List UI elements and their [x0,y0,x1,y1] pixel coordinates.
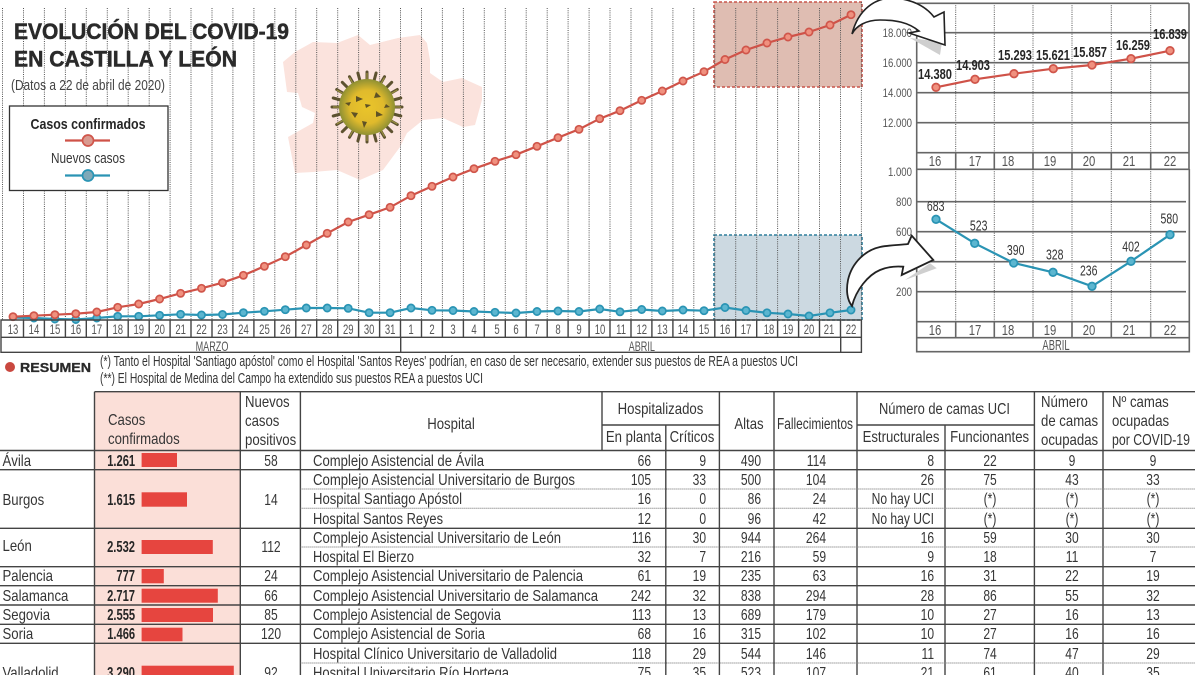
zoom chart: confirmed cases 16-22 April: 16 [929,153,941,169]
hospital row: Ávila: Complejo Asistencial de Ávila [313,453,484,470]
hospital row: León universitario: 30 [693,529,706,546]
date axis: 8 [555,321,561,338]
date axis: 2 [429,321,435,338]
province: Soria: Soria [3,626,33,643]
table header: Hospital [427,416,475,433]
zoom chart: confirmed cases 16-22 April: 16.259 [1116,36,1150,53]
hospital row: Santos Reyes [313,510,1159,528]
zoom chart: confirmed cases 16-22 April: 21 [1123,153,1135,169]
table header: Casos [108,412,145,429]
date axis: MARZO [196,338,228,355]
province: Palencia: 24 [264,567,278,584]
legend: Nuevos casos [51,150,125,167]
zoom chart: confirmed cases 16-22 April: 14.000 [883,87,912,100]
hospital row: Palencia: 19 [693,567,706,584]
legend [10,106,168,190]
hospital row: El Bierzo: 11 [1066,548,1079,565]
hospital row: Salamanca: 242 [631,587,651,604]
hospital row: Salamanca: 28 [921,587,934,604]
hospital row: Burgos universitario: Complejo Asistencial Universitario de Burgos [313,472,575,489]
province: Salamanca: Salamanca [3,588,68,605]
hospital row: Salamanca [313,587,1160,605]
province: León: 112 [261,538,281,555]
hospital row: Santiago Apóstol: (*) [1147,490,1159,507]
province: Soria: 1.466 [107,625,136,642]
hospital row: El Bierzo: 32 [638,548,651,565]
hospital row: Burgos universitario: 105 [631,471,651,488]
hospital row: Clínico Valladolid: 29 [693,645,706,662]
hospital row: Burgos universitario: 33 [1146,471,1160,488]
hospital row: Santiago Apóstol: 24 [813,490,826,507]
date axis: 16 [71,321,81,338]
province: Burgos: Burgos [3,492,44,509]
footnotes: (*) Tanto el Hospital 'Santiago apóstol' como el Hospital 'Santos Reyes' podrían, en caso de ser necesario, extender sus puestos de REA a puestos UCI [100,354,798,370]
zoom chart: confirmed cases 16-22 April: 20 [1083,153,1095,169]
zoom chart: confirmed cases 16-22 April: 14.380 [918,65,952,82]
date axis: 4 [471,321,477,338]
hospital row: Soria: 315 [741,625,761,642]
province: León: León [3,538,32,555]
date axis: 14 [29,321,40,338]
hospital row: Ávila: 66 [638,452,651,469]
hospital row: León universitario: 116 [632,529,651,546]
hospital row: Santos Reyes: 12 [638,510,651,527]
hospital row: Segovia [313,606,1160,624]
zoom chart: new cases 16-22 April: 17 [969,322,981,338]
hospital row: Clínico Valladolid: Hospital Clínico Universitario de Valladolid [313,646,557,663]
hospital row: Segovia: 13 [693,606,706,623]
table header: de camas [1041,413,1098,430]
date axis: 31 [385,321,396,338]
date axis: 20 [804,321,815,338]
date axis: 28 [322,321,333,338]
title [14,19,289,72]
hospital row: Segovia: 689 [741,606,761,623]
hospital row: Burgos universitario: 43 [1065,471,1079,488]
hospital row: Ávila: 8 [927,452,934,469]
hospital row: Salamanca: 32 [693,587,706,604]
table header: positivos [245,432,296,449]
date axis: 9 [576,321,582,338]
hospital row: Santiago Apóstol: (*) [1066,490,1078,507]
zoom chart: new cases 16-22 April [888,166,1189,354]
hospital row: Segovia: Complejo Asistencial de Segovia [313,607,501,624]
line chart: confirmed cases [9,11,855,320]
hospital row: León universitario: Complejo Asistencial Universitario de León [313,530,561,547]
hospital row: Palencia: Complejo Asistencial Universitario de Palencia [313,568,583,585]
date axis: 18 [764,321,775,338]
zoom chart: new cases 16-22 April: 328 [1046,246,1063,263]
province: Salamanca: 2.717 [107,587,135,604]
table header: Hospitalizados [618,401,703,418]
date axis: 19 [133,321,144,338]
hospital row: Salamanca: 32 [1146,587,1160,604]
date axis: 23 [217,321,228,338]
table header: Número [1041,394,1088,411]
date axis: 13 [657,321,668,338]
legend: Casos confirmados [30,116,146,133]
table header: Funcionantes [950,429,1029,446]
line chart: new cases [13,304,855,323]
hospital row: Soria: 16 [1146,625,1160,642]
hospital row: Santos Reyes: (*) [1147,510,1159,527]
hospital row: Segovia: 13 [1146,606,1160,623]
hospital row: Ávila: 490 [741,452,761,469]
hospital row: León universitario: 30 [1146,529,1160,546]
zoom chart: new cases 16-22 April: 402 [1122,238,1140,255]
province: Burgos [2,491,278,509]
province: Ávila: Ávila [3,452,31,470]
hospital row: El Bierzo: 9 [927,548,934,565]
hospital row: León universitario: 16 [921,529,934,546]
zoom chart: new cases 16-22 April: 20 [1083,322,1095,338]
date axis: 22 [196,321,207,338]
zoom chart: confirmed cases 16-22 April: 16.000 [883,57,912,70]
map of Castilla y León [283,35,482,180]
table header: Fallecimientos [777,416,853,433]
zoom chart: new cases 16-22 April: 600 [896,226,912,239]
date axis: 6 [513,321,519,338]
zoom chart: confirmed cases 16-22 April: 18 [1002,153,1014,169]
zoom chart: confirmed cases 16-22 April: 17 [969,153,981,169]
province: Ávila [2,452,278,470]
table header: Nuevos [245,394,290,411]
date axis: 19 [783,321,794,338]
zoom chart: new cases 16-22 April: 390 [1007,241,1024,258]
table header: ocupadas [1112,413,1169,430]
date axis: 7 [534,321,540,338]
title: EVOLUCIÓN DEL COVID-19 [14,19,289,44]
hospital row: Segovia: 179 [806,606,826,623]
hospital row: Santiago Apóstol: Hospital Santiago Apóstol [313,491,462,508]
hospital row: Santos Reyes: (*) [984,510,996,527]
table header: Número de camas UCI [879,401,1010,418]
hospital row: Salamanca: 86 [983,587,997,604]
hospital row: Santos Reyes: No hay UCI [872,510,934,527]
table header: casos [245,413,279,430]
hospital row: Clínico Valladolid: 544 [741,645,761,662]
zoom chart: confirmed cases 16-22 April: 15.621 [1036,46,1070,63]
hospital row: Ávila: 9 [699,452,706,469]
table rules [0,392,1195,675]
table header: Críticos [670,429,714,446]
hospital row: Clínico Valladolid: 146 [806,645,826,662]
hospital row: Soria: Complejo Asistencial de Soria [313,626,485,643]
hospital row: Santos Reyes: Hospital Santos Reyes [313,511,443,528]
hospital row: Segovia: 16 [1065,606,1079,623]
province: Segovia: Segovia [3,607,50,624]
hospital row: Santiago Apóstol: No hay UCI [872,490,934,507]
hospital row: Palencia: 16 [921,567,934,584]
zoom chart: new cases 16-22 April: 22 [1164,322,1176,338]
footnotes: (**) El Hospital de Medina del Campo ha extendido sus puestos REA a puestos UCI [100,371,483,387]
hospital row: Clínico Valladolid [313,645,1160,663]
arrow: to confirmed cases zoom [852,0,945,55]
hospital row: El Bierzo: 59 [813,548,826,565]
hospital row: Santiago Apóstol: 0 [699,490,706,507]
province: León: 2.532 [107,538,135,555]
hospital row: Palencia: 31 [983,567,997,584]
hospital row: Segovia: 113 [632,606,651,623]
hospital row: Santiago Apóstol: 86 [748,490,761,507]
date axis: 18 [112,321,123,338]
hospital row: El Bierzo: 18 [983,548,997,565]
highlight box: confirmed cases [714,2,862,87]
zoom chart: confirmed cases 16-22 April: 16.839 [1153,25,1187,42]
hospital row: León universitario [313,529,1160,547]
hospital row: Burgos universitario: 26 [921,471,934,488]
table header: Altas [734,416,764,433]
province: Palencia: Palencia [3,568,53,585]
province: Burgos: 14 [264,491,278,508]
province: Segovia: 85 [264,606,278,623]
hospital row: Ávila [313,452,1157,470]
hospital row: Salamanca: 55 [1065,587,1079,604]
hospital row: Clínico Valladolid: 74 [983,645,997,662]
hospital row: El Bierzo: 7 [699,548,706,565]
hospital row: Soria [313,625,1160,643]
province: Ávila: 1.261 [107,452,136,469]
zoom chart: new cases 16-22 April: 21 [1123,322,1135,338]
date axis: 12 [636,321,647,338]
province: Salamanca: 66 [264,587,278,604]
zoom chart: new cases 16-22 April: 800 [896,196,912,209]
province: Salamanca [2,587,278,605]
title: EN CASTILLA Y LEÓN [14,46,237,72]
hospital row: Salamanca: Complejo Asistencial Universitario de Salamanca [313,588,598,605]
hospital row: Palencia: 63 [813,567,826,584]
province: Segovia [2,606,278,624]
hospital row: León universitario: 59 [983,529,997,546]
hospital row: Santos Reyes: 0 [699,510,706,527]
zoom chart: confirmed cases 16-22 April: 15.857 [1073,43,1107,60]
hospital row: Clínico Valladolid: 118 [632,645,651,662]
date axis: ABRIL [629,338,655,355]
date axis: 3 [450,321,456,338]
table header [108,394,1190,449]
date axis: 17 [741,321,752,338]
hospital row: Ávila: 22 [983,452,997,469]
date axis: 13 [8,321,19,338]
hospital row: El Bierzo: 7 [1150,548,1157,565]
hospital row: Soria: 27 [983,625,997,642]
hospital row: Ávila: 9 [1150,452,1157,469]
hospital row: Santos Reyes: 96 [748,510,761,527]
highlighted column: confirmed cases [94,392,240,675]
highlight box: new cases [714,235,862,320]
date axis: 21 [824,321,835,338]
hospital row: Santos Reyes: 42 [813,510,826,527]
zoom chart: new cases 16-22 April: 18 [1002,322,1014,338]
province: Palencia: 777 [116,567,135,584]
date axis: 14 [678,321,689,338]
hospital row: Ávila: 9 [1069,452,1076,469]
zoom chart: confirmed cases 16-22 April: 12.000 [883,117,912,130]
zoom chart: confirmed cases 16-22 April: 19 [1044,153,1056,169]
arrow: to new cases zoom [847,236,937,306]
hospital row: Burgos universitario: 104 [806,471,826,488]
hospital row: Salamanca: 838 [741,587,761,604]
date axis: 26 [280,321,291,338]
hospital row: Burgos universitario: 500 [741,471,761,488]
hospital row: Segovia: 27 [983,606,997,623]
province: Ávila: 58 [264,452,278,469]
hospital row: El Bierzo: Hospital El Bierzo [313,549,414,566]
zoom chart: confirmed cases 16-22 April: 14.903 [956,56,990,73]
hospital row: Soria: 16 [1065,625,1079,642]
hospital row: León universitario: 264 [806,529,826,546]
hospital row: Segovia: 10 [921,606,934,623]
date axis [1,320,861,355]
hospital row: Río Hortega [313,664,1160,675]
zoom chart: new cases 16-22 April: ABRIL [1042,337,1070,354]
date axis: 11 [616,321,626,338]
date axis: 15 [699,321,710,338]
date axis: 17 [92,321,102,338]
date axis: 30 [364,321,375,338]
hospital row: Salamanca: 294 [806,587,826,604]
hospital row: Santiago Apóstol [313,490,1159,508]
zoom chart: confirmed cases 16-22 April: 15.293 [998,46,1032,63]
date axis: 25 [259,321,270,338]
hospital row: Burgos universitario: 33 [693,471,706,488]
date axis: 5 [494,321,500,338]
zoom chart: new cases 16-22 April: 16 [929,322,941,338]
hospital row: Santos Reyes: (*) [1066,510,1078,527]
hospital row: Palencia: 22 [1065,567,1079,584]
section label: resumen: RESUMEN [20,360,91,375]
province: León [2,538,281,555]
zoom chart: new cases 16-22 April: 580 [1161,210,1178,227]
table header: Estructurales [863,429,939,446]
province: Segovia: 2.555 [107,606,136,623]
date axis: 16 [720,321,731,338]
hospital row: Santiago Apóstol: 16 [638,490,651,507]
hospital row: Palencia: 61 [638,567,651,584]
date axis: 27 [301,321,312,338]
hospital row: Santiago Apóstol: (*) [984,490,996,507]
hospital row: Burgos universitario: 75 [983,471,997,488]
vertical date grid [2,2,861,320]
hospital row: Ávila: 114 [807,452,826,469]
province: Valladolid [2,664,278,675]
date axis: 24 [238,321,249,338]
subtitle: (Datos a 22 de abril de 2020) [11,78,165,94]
date axis: 15 [50,321,61,338]
icon: coronavirus [332,72,402,142]
hospital row: León universitario: 944 [741,529,761,546]
zoom chart: new cases 16-22 April: 1.000 [888,166,912,179]
date axis: 29 [343,321,354,338]
table header: confirmados [108,431,180,448]
hospital row: León universitario: 30 [1065,529,1079,546]
zoom chart: new cases 16-22 April: 19 [1044,322,1056,338]
hospital row: Palencia: 235 [741,567,761,584]
zoom chart: new cases 16-22 April: 236 [1080,262,1097,279]
date axis: 1 [408,321,414,338]
date axis: 21 [175,321,186,338]
province: Soria: 120 [261,625,281,642]
hospital row: Palencia: 19 [1146,567,1160,584]
footnotes [100,354,798,387]
province: Palencia [2,567,278,585]
data table [0,392,1195,675]
hospital row: El Bierzo [313,548,1157,566]
province: Soria [2,625,281,643]
hospital row: Clínico Valladolid: 47 [1065,645,1079,662]
zoom chart: confirmed cases 16-22 April: 22 [1164,153,1176,169]
date axis: 10 [595,321,606,338]
date axis: 20 [154,321,165,338]
table header: ocupadas [1041,432,1098,449]
table header: En planta [606,429,662,446]
hospital row: Palencia [313,567,1160,585]
hospital row: Soria: 68 [638,625,651,642]
zoom chart: new cases 16-22 April: 523 [970,217,987,234]
hospital row: Soria: 102 [806,625,826,642]
zoom chart: new cases 16-22 April: 200 [896,286,912,299]
zoom chart: new cases 16-22 April: 683 [927,197,944,214]
hospital row: Clínico Valladolid: 29 [1146,645,1160,662]
table header: Nº camas [1112,394,1169,411]
hospital row: Soria: 10 [921,625,934,642]
hospital row: El Bierzo: 216 [741,548,761,565]
hospital row: Soria: 16 [693,625,706,642]
province: Burgos: 1.615 [107,491,136,508]
hospital row: Clínico Valladolid: 11 [922,645,934,662]
zoom chart: confirmed cases 16-22 April [883,3,1189,169]
date axis: 22 [846,321,857,338]
zoom chart: confirmed cases 16-22 April: 18.000 [883,27,912,40]
hospital row: Burgos universitario [313,471,1160,489]
